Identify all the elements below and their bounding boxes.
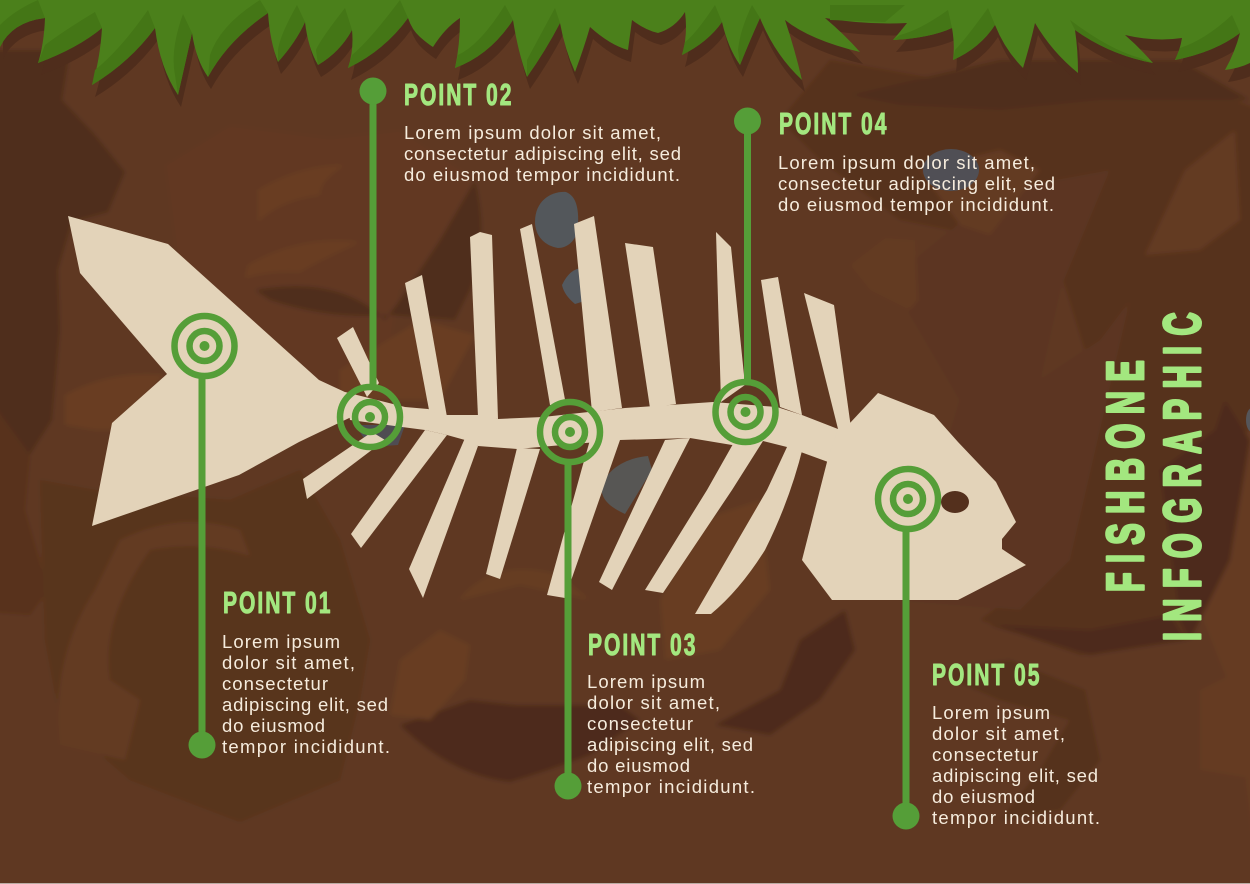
text block: point 01: dolor sit amet,	[222, 652, 355, 673]
text block: point 03: tempor incididunt.	[587, 776, 755, 797]
text block: point 03: Lorem ipsum	[587, 671, 705, 692]
point 04 connector and target	[716, 108, 776, 442]
text block: point 04: do eiusmod tempor incididunt.	[778, 194, 1054, 215]
text block: point 05: adipiscing elit, sed	[932, 765, 1098, 786]
text block: point 01: consectetur	[222, 673, 328, 694]
text block: point 05: tempor incididunt.	[932, 807, 1100, 828]
text block: point 05: dolor sit amet,	[932, 723, 1065, 744]
upper ribs	[337, 216, 851, 429]
lower ribs	[303, 430, 803, 614]
spine	[345, 392, 870, 470]
head	[802, 393, 1026, 600]
text block: point 01: do eiusmod	[222, 715, 325, 736]
title: INFOGRAPHIC	[1154, 312, 1212, 641]
text block: point 05: consectetur	[932, 744, 1038, 765]
fish skeleton	[68, 216, 1026, 614]
title: FISHBONE	[1097, 360, 1155, 592]
text block: point 03: do eiusmod	[587, 755, 690, 776]
text block: point 05: Lorem ipsum	[932, 702, 1050, 723]
text block: point 03: consectetur	[587, 713, 693, 734]
text block: point 04: consectetur adipiscing elit, sed	[778, 173, 1055, 194]
point 05 connector and target	[878, 469, 938, 830]
title	[1097, 312, 1212, 641]
text block: point 02: Lorem ipsum dolor sit amet,	[404, 122, 661, 143]
text block: point 05: do eiusmod	[932, 786, 1035, 807]
heading: point 03: POINT 03	[588, 627, 695, 662]
point 03 connector and target	[540, 402, 600, 800]
text block: point 03: dolor sit amet,	[587, 692, 720, 713]
text block: point 02: do eiusmod tempor incididunt.	[404, 164, 680, 185]
stones	[355, 149, 1250, 514]
heading: point 02: POINT 02	[404, 77, 511, 112]
text block: point 02: consectetur adipiscing elit, sed	[404, 143, 681, 164]
heading: point 05: POINT 05	[932, 657, 1039, 692]
text block: point 01: adipiscing elit, sed	[222, 694, 388, 715]
point 02 connector and target	[340, 78, 400, 447]
grass	[0, 0, 1250, 107]
point 01 connector and target	[174, 316, 234, 758]
eye socket	[941, 491, 969, 513]
text block: point 04: Lorem ipsum dolor sit amet,	[778, 152, 1035, 173]
text block: point 03: adipiscing elit, sed	[587, 734, 753, 755]
text block: point 01: Lorem ipsum	[222, 631, 340, 652]
text block: point 01: tempor incididunt.	[222, 736, 390, 757]
heading: point 01: POINT 01	[223, 585, 330, 620]
tail fin	[68, 216, 362, 526]
heading: point 04: POINT 04	[779, 106, 887, 141]
